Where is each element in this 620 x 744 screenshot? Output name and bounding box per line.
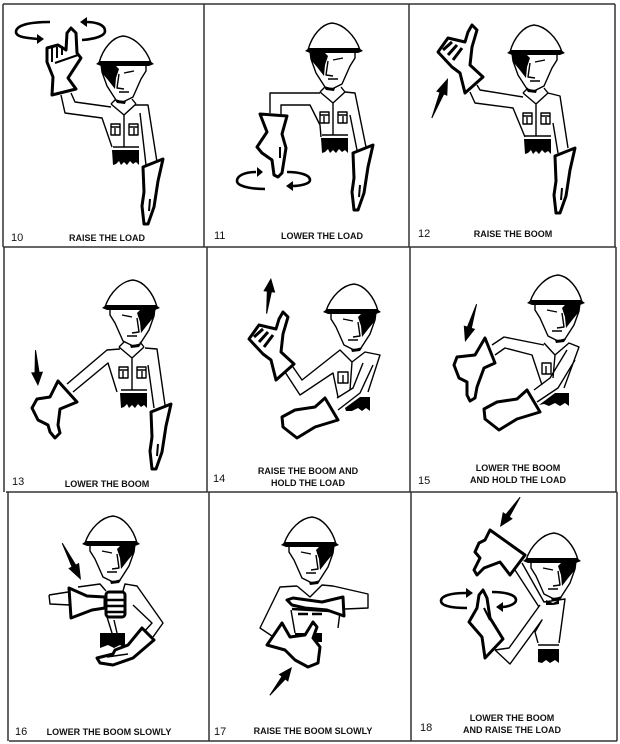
icon: holding glove	[484, 390, 540, 430]
panel 13: lower the boom	[12, 280, 171, 489]
label	[470, 463, 566, 485]
label: RAISE THE LOAD	[69, 233, 145, 243]
icon: thumb-up glove	[249, 312, 294, 380]
figure 10	[61, 36, 163, 224]
panel 16: lower the boom slowly	[15, 516, 171, 738]
label: LOWER THE LOAD	[281, 231, 363, 241]
icon: down arrow	[57, 540, 86, 583]
figure 16	[49, 516, 163, 648]
number 15: 15	[418, 475, 430, 487]
number 12: 12	[418, 228, 430, 240]
icon: raised index finger glove	[47, 28, 81, 95]
label: HOLD THE LOAD	[271, 478, 345, 488]
icon: pointing glove	[69, 588, 105, 618]
label: AND HOLD THE LOAD	[470, 475, 566, 485]
label: LOWER THE BOOM SLOWLY	[47, 727, 171, 737]
icon: down arrow	[495, 494, 525, 530]
panel 18: lower the boom and raise the load	[420, 494, 581, 735]
label	[258, 466, 359, 488]
label: LOWER THE BOOM	[476, 463, 560, 473]
icon: pointing-down glove	[257, 114, 287, 177]
figure 14	[285, 284, 381, 411]
icon: holding glove	[282, 398, 338, 438]
figure 12	[470, 25, 575, 213]
icon: rotation arrows	[16, 17, 105, 44]
icon: rotation arrows	[441, 588, 516, 612]
figure 13	[67, 280, 171, 469]
icon: down arrow	[30, 350, 44, 386]
icon: thumb-down glove	[32, 381, 77, 438]
panel 15: lower the boom and hold the load	[418, 275, 585, 487]
number 18: 18	[420, 722, 432, 734]
icon: pointing-up glove	[469, 590, 503, 658]
icon: fist	[106, 592, 125, 617]
figure 18	[495, 533, 581, 664]
figure 15	[492, 275, 585, 406]
panel 11: lower the load	[214, 23, 373, 242]
panel 14: raise the boom and hold the load	[213, 277, 381, 488]
icon: rotation arrows	[237, 167, 310, 191]
panel 17: raise the boom slowly	[214, 517, 372, 738]
label: LOWER THE BOOM	[65, 479, 149, 489]
panel 10: raise the load	[11, 17, 163, 244]
figure 11	[270, 23, 373, 210]
label: RAISE THE BOOM AND	[258, 466, 359, 476]
icon: thumb-down glove	[474, 530, 525, 575]
label: RAISE THE BOOM SLOWLY	[254, 726, 372, 736]
icon: thumb-up glove	[438, 25, 483, 93]
icon: up arrow	[261, 277, 277, 314]
icon: lower cupped glove	[97, 628, 154, 665]
label	[463, 713, 561, 735]
number 17: 17	[214, 726, 226, 738]
number 11: 11	[214, 230, 225, 242]
label: RAISE THE BOOM	[474, 229, 552, 239]
icon: thumb-up glove	[267, 622, 320, 667]
number 13: 13	[12, 476, 24, 488]
figure 17	[260, 517, 368, 642]
icon: horizontal hand	[287, 597, 344, 616]
number 14: 14	[213, 473, 225, 485]
number 16: 16	[15, 726, 27, 738]
icon: up arrow	[426, 76, 454, 120]
icon: thumb-down glove	[454, 338, 495, 401]
number 10: 10	[11, 232, 23, 244]
icon: down arrow	[459, 302, 482, 344]
label: LOWER THE BOOM	[470, 713, 554, 723]
panel 12: raise the boom	[418, 25, 575, 240]
label: AND RAISE THE LOAD	[463, 725, 561, 735]
icon: up arrow	[265, 663, 297, 699]
